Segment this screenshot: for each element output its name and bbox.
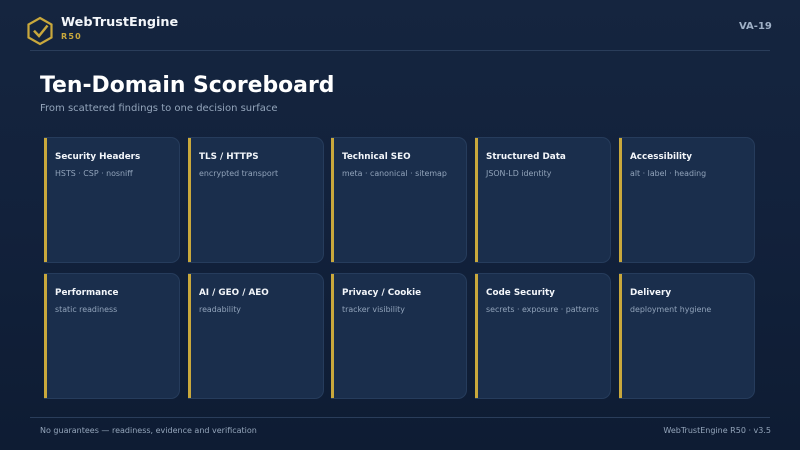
card: Structured Data: Structured Data [486,152,566,162]
card: Delivery [619,273,755,399]
card: Code Security: Code Security [486,288,555,298]
card: Code Security [475,273,611,399]
title: Ten-Domain Scoreboard [40,73,334,98]
card: Performance: Performance [55,288,119,298]
subtitle: From scattered findings to one decision surface [40,103,278,114]
card: Technical SEO: Technical SEO [342,152,411,162]
card: Security Headers [44,137,180,263]
scoreboard grid [44,137,755,399]
card: Accessibility [619,137,755,263]
card: Performance [44,273,180,399]
card: Accessibility: alt · label · heading [630,169,706,178]
card: Delivery: Delivery [630,288,671,298]
card: TLS / HTTPS [188,137,324,263]
footer version: WebTrustEngine R50 · v3.5 [663,426,771,435]
card: AI / GEO / AEO [188,273,324,399]
card: AI / GEO / AEO: readability [199,305,241,314]
card: Privacy / Cookie [331,273,467,399]
card: Performance: static readiness [55,305,117,314]
footer disclaimer: No guarantees — readiness, evidence and verification [40,426,257,435]
icon: hexagon check logo [27,16,53,46]
card: Code Security: secrets · exposure · patterns [486,305,599,314]
card: Delivery: deployment hygiene [630,305,711,314]
card: TLS / HTTPS: TLS / HTTPS [199,152,259,162]
card: Privacy / Cookie: Privacy / Cookie [342,288,421,298]
card: Security Headers: Security Headers [55,152,140,162]
card: AI / GEO / AEO: AI / GEO / AEO [199,288,269,298]
brand tag: R50 [61,32,82,41]
card: Accessibility: Accessibility [630,152,692,162]
card: TLS / HTTPS: encrypted transport [199,169,278,178]
card: Technical SEO [331,137,467,263]
card: Structured Data [475,137,611,263]
slide code: VA-19 [739,21,772,32]
brand name: WebTrustEngine [61,15,178,30]
card: Security Headers: HSTS · CSP · nosniff [55,169,133,178]
card: Technical SEO: meta · canonical · sitemap [342,169,447,178]
card: Structured Data: JSON-LD identity [486,169,551,178]
card: Privacy / Cookie: tracker visibility [342,305,405,314]
